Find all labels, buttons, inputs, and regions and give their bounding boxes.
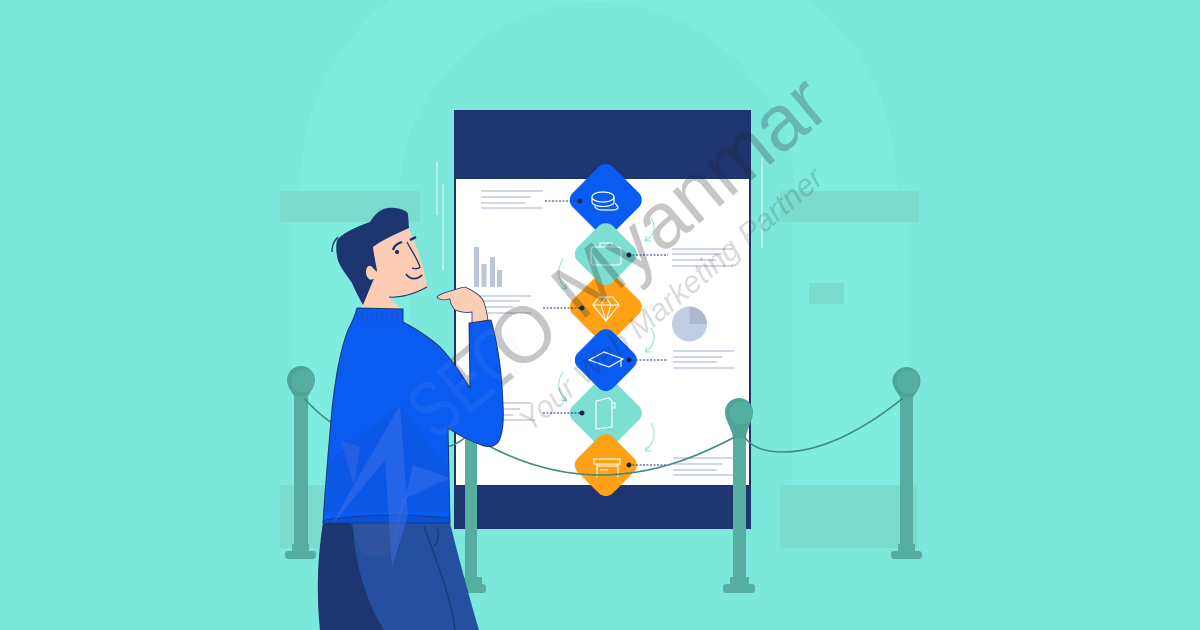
post: front middle bbox=[723, 398, 755, 593]
hand bbox=[437, 287, 488, 323]
hair bbox=[336, 208, 409, 305]
post: back left bbox=[285, 366, 316, 559]
post: back right bbox=[891, 367, 922, 559]
bar chart bbox=[474, 247, 502, 287]
step diamond: box bbox=[571, 430, 641, 500]
step diamond: document bbox=[566, 373, 646, 453]
connector dots and dashes bbox=[543, 198, 668, 468]
text lines: document bbox=[480, 403, 535, 420]
pie chart bbox=[672, 306, 707, 342]
board frame bbox=[454, 110, 751, 529]
text lines: briefcase bbox=[672, 249, 733, 266]
board white panel bbox=[456, 179, 749, 485]
step diamond: gem bbox=[566, 267, 646, 347]
step diamond: briefcase bbox=[571, 219, 641, 289]
ropes bbox=[304, 398, 903, 475]
trousers shadow bbox=[318, 523, 384, 630]
man bbox=[318, 208, 503, 630]
post: front left bbox=[460, 430, 486, 593]
step diamond: graduation cap bbox=[571, 325, 641, 395]
trousers bbox=[318, 523, 479, 630]
trouser pocket line bbox=[424, 526, 455, 630]
text lines: graduation cap bbox=[673, 351, 735, 368]
text lines: box bbox=[673, 458, 735, 475]
white sparkle lines bbox=[437, 158, 762, 270]
ear bbox=[366, 266, 378, 280]
text lines: diamond bbox=[480, 296, 531, 313]
text lines: coins bbox=[481, 191, 543, 208]
collar ribbing bbox=[362, 312, 397, 322]
watermark: tagline: Your Web Marketing Partner bbox=[512, 159, 831, 438]
sweater hem bbox=[323, 515, 450, 523]
sweater shading bbox=[325, 405, 450, 512]
face features bbox=[332, 237, 422, 279]
curved arrows bbox=[559, 218, 654, 451]
jaw line bbox=[389, 287, 427, 297]
step diamond: coins bbox=[566, 160, 646, 240]
watermark: SEO Myanmar: SEO Myanmar bbox=[390, 57, 844, 455]
neck and face bbox=[360, 222, 427, 312]
exhibition board bbox=[454, 110, 751, 529]
sweater body bbox=[323, 308, 503, 523]
gallery wall: arch and columns bbox=[280, 0, 919, 548]
sweater logo facets bbox=[332, 405, 450, 567]
watermark overlay on sweater: SEO bbox=[390, 305, 545, 455]
